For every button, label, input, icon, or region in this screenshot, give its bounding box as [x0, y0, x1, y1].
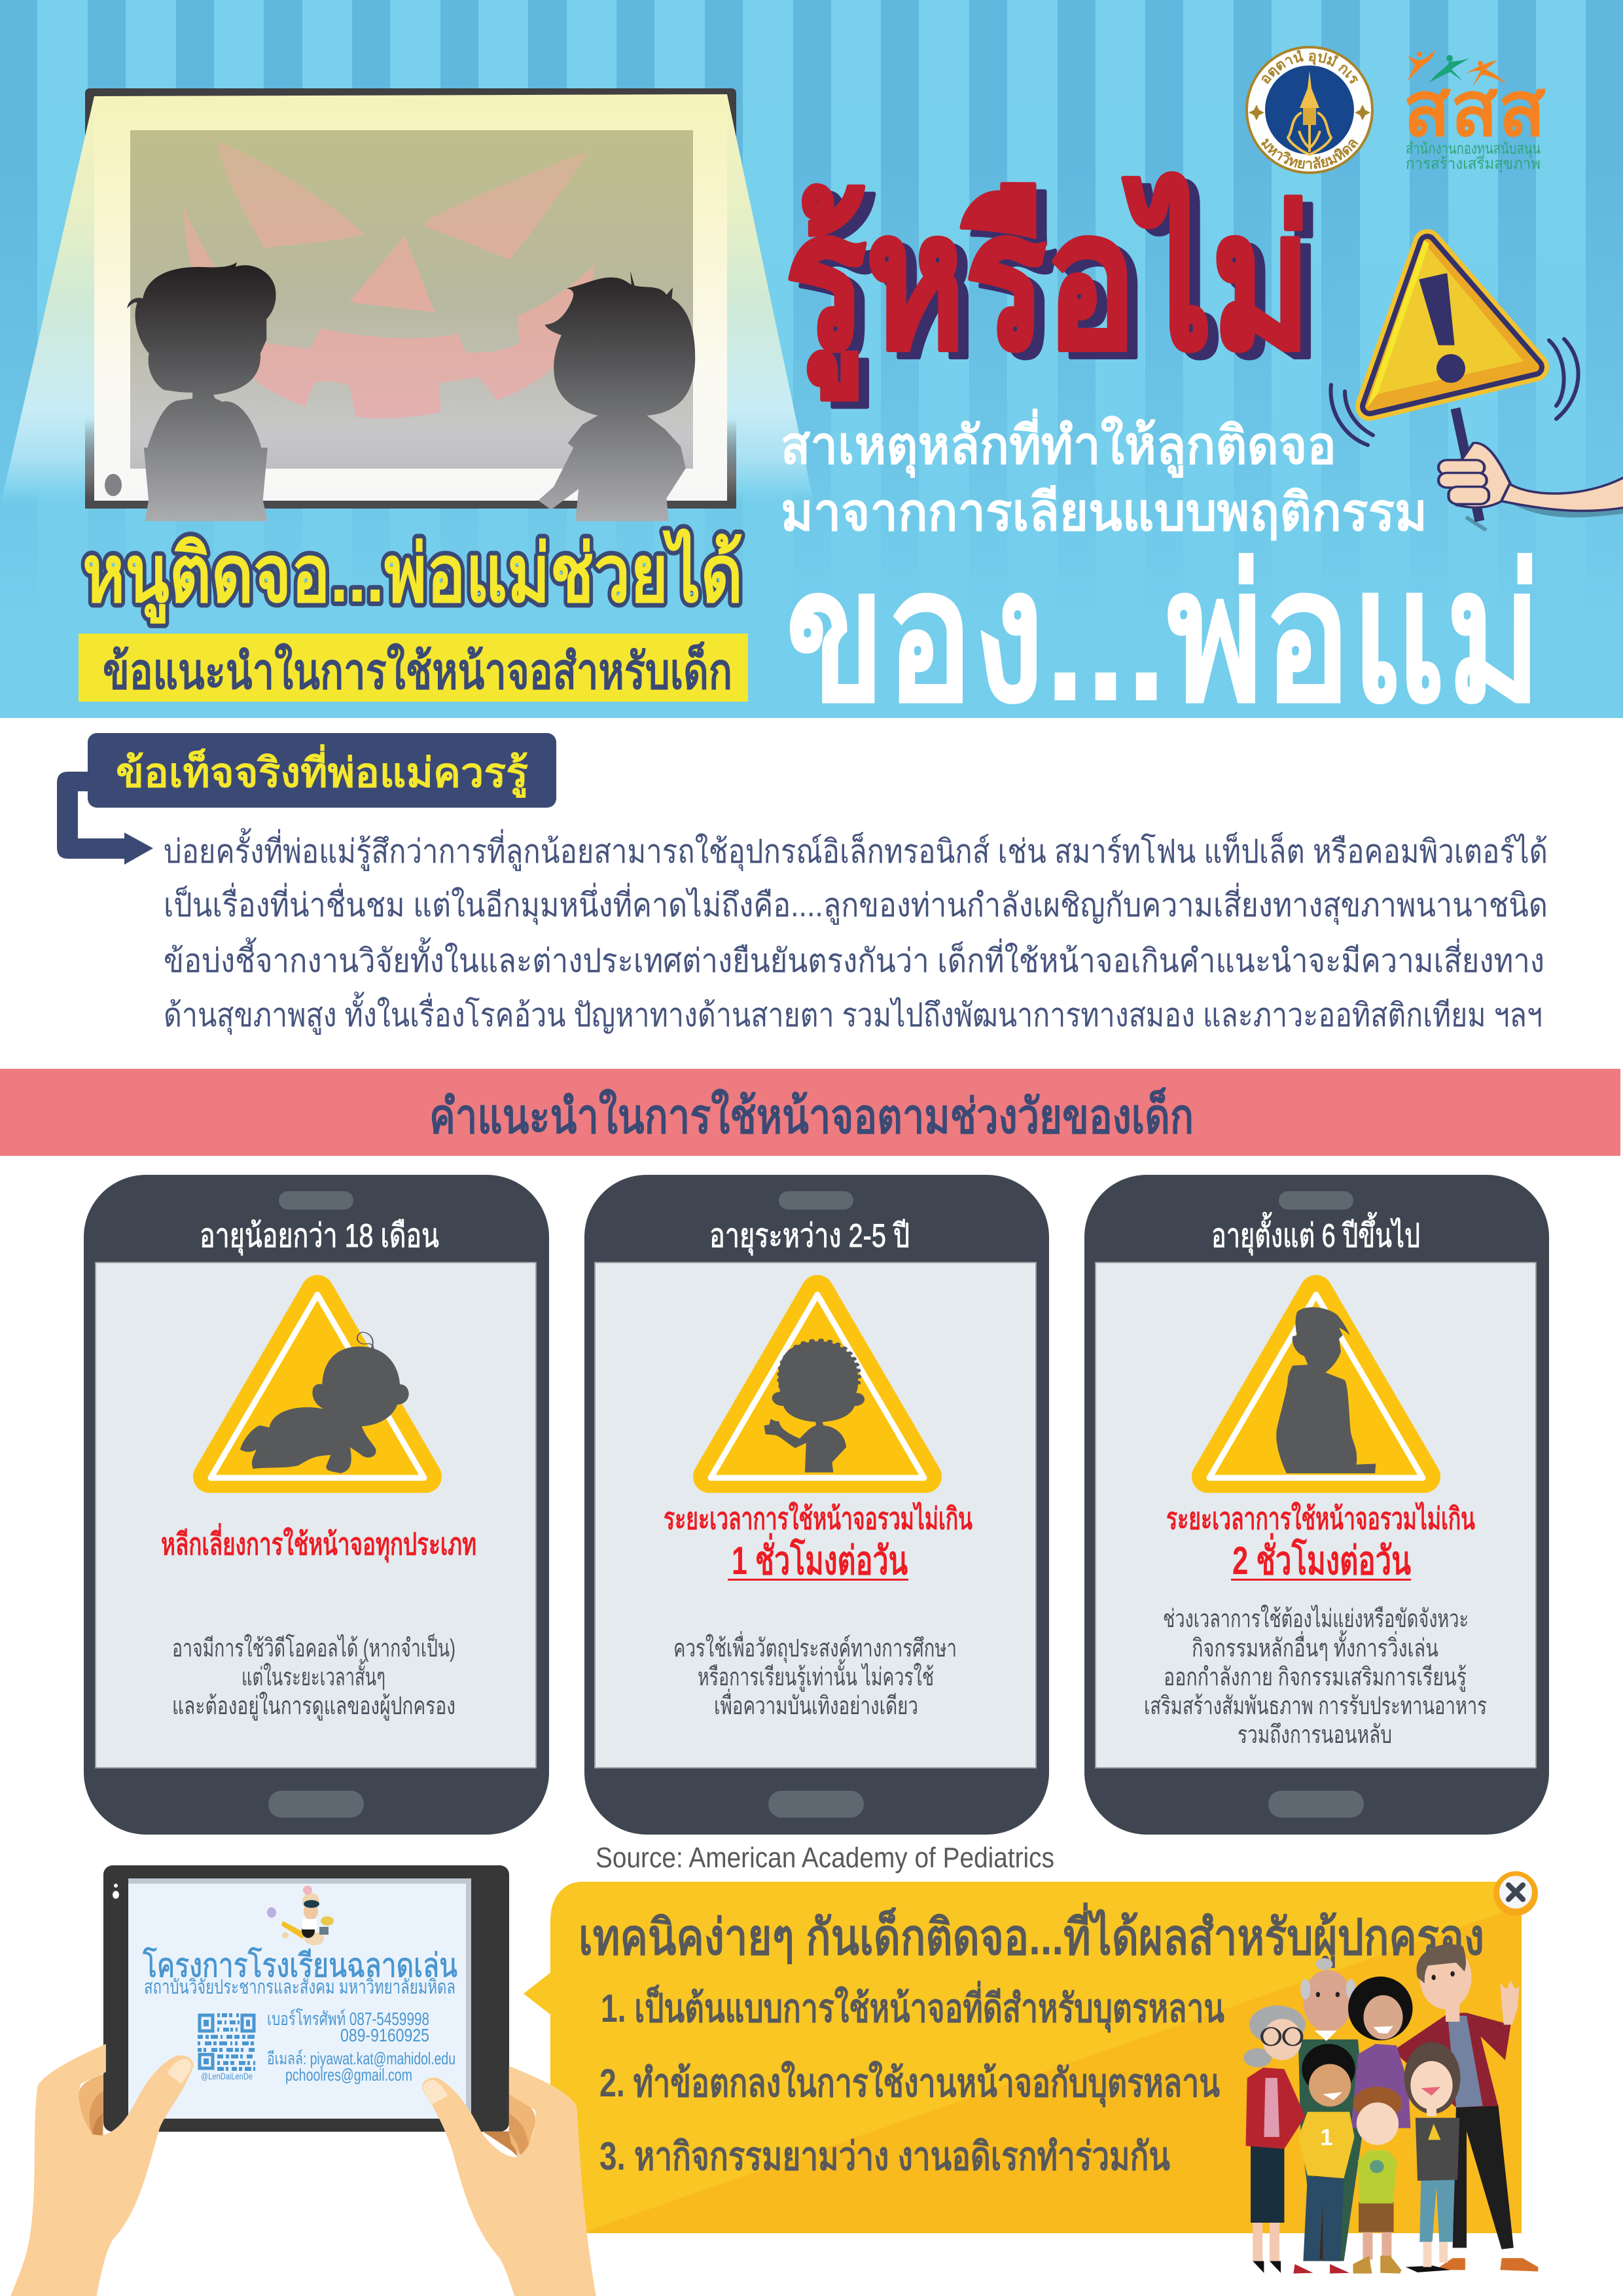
section: facts [57, 733, 1548, 1035]
tablet device [103, 1865, 509, 2132]
advice details: และต้องอยู่ในการดูแลของผู้ปกครอง [172, 1692, 455, 1721]
pumpkin face [184, 141, 595, 418]
left child silhouette [128, 262, 276, 521]
section banner: คำแนะนำในการใช้หน้าจอตามช่วงวัยของเด็ก [429, 1088, 1194, 1143]
QR handle: @LenDaiLenDe [201, 2071, 253, 2081]
tip 3: 3. หากิจกรรมยามว่าง งานอดิเรกทำร่วมกัน [599, 2134, 1170, 2178]
hero panel [0, 0, 1623, 740]
advice details: ควรใช้เพื่อวัตถุประสงค์ทางการศึกษา [673, 1631, 957, 1663]
project mascot logo [267, 1886, 334, 1945]
red advice: หลีกเลี่ยงการใช้หน้าจอทุกประเภท [161, 1523, 476, 1563]
headline line: main cause: สาเหตุหลักที่ทำให้ลูกติดจอ [781, 410, 1336, 477]
panel: tips speech bubble [524, 1871, 1538, 2233]
family illustration [1243, 1945, 1538, 2274]
grandmother [1243, 2005, 1306, 2273]
source note: Source: American Academy of Pediatrics [596, 1842, 1054, 1874]
subtitle yellow bar [79, 634, 748, 702]
logo: ThaiHealth: การสร้างเสริมสุขภาพ [1406, 155, 1541, 173]
motion arcs [1330, 339, 1578, 445]
project name: โครงการโรงเรียนฉลาดเล่น [143, 1947, 457, 1984]
arrow connector [57, 772, 153, 865]
tablet with hands [10, 1865, 596, 2296]
advice details: เสริมสร้างสัมพันธภาพ การรับประทานอาหาร [1144, 1693, 1487, 1720]
time limit [728, 1533, 908, 1583]
left hand [10, 2044, 194, 2296]
facts paragraph [164, 828, 1548, 1035]
logo: ThaiHealth [1403, 50, 1546, 173]
logo: ThaiHealth: สสส [1403, 66, 1546, 152]
arm shadow [1512, 497, 1623, 518]
advice details: ช่วงเวลาการใช้ต้องไม่แย่งหรือขัดจังหวะ [1163, 1605, 1469, 1633]
warning triangle with child [709, 1291, 925, 1478]
advice details: กิจกรรมหลักอื่นๆ ทั้งการวิ่งเล่น [1192, 1630, 1438, 1662]
contact details: อีเมลล์: piyawat.kat@mahidol.edu [267, 2049, 455, 2068]
advice details: แต่ในระยะเวลาสั้นๆ [241, 1659, 385, 1691]
institute name: สถาบันวิจัยประชากรและสังคม มหาวิทยาลัยมหิดล [144, 1977, 455, 1998]
headline: do you know: รู้หรือไม่ [796, 179, 1321, 408]
age heading: อายุน้อยกว่า 18 เดือน [200, 1217, 439, 1255]
contact details [267, 2008, 455, 2085]
father [1397, 1945, 1538, 2271]
warning triangle with baby [209, 1291, 425, 1478]
older boy [1293, 2044, 1355, 2274]
advice details: หรือการเรียนรู้เท่านั้น ไม่ควรใช้ [698, 1659, 934, 1692]
seal crest [1288, 71, 1331, 154]
mother [1348, 1977, 1413, 2128]
panel: phone ages 2-5 [584, 1175, 1049, 1835]
tip 2: 2. ทำข้อตกลงในการใช้งานหน้าจอกับบุตรหลาน [599, 2060, 1220, 2108]
advice details: ออกกำลังกาย กิจกรรมเสริมการเรียนรู้ [1164, 1664, 1467, 1692]
right child silhouette [538, 271, 695, 521]
contact details: 089-9160925 [340, 2025, 429, 2045]
advice details: เพื่อความบันเทิงอย่างเดียว [714, 1689, 918, 1720]
headline line: imitating behaviour: มาจากการเลียนแบบพฤติกรรม [781, 483, 1427, 541]
advice details [1144, 1605, 1487, 1749]
advice details: อาจมีการใช้วิดีโอคอลได้ (หากจำเป็น) [172, 1633, 455, 1662]
panel: phone ages 6 and up [1084, 1175, 1549, 1835]
facts label [88, 733, 556, 808]
sign shadow and pole [1455, 408, 1486, 530]
projector screen with pumpkin face and children [0, 88, 815, 521]
logo: ThaiHealth: สำนักงานกองทุนสนับสนุน [1406, 140, 1541, 158]
hero background with stripes [0, 0, 1623, 718]
warning triangle [1366, 240, 1535, 408]
tip 1: 1. เป็นต้นแบบการใช้หน้าจอที่ดีสำหรับบุตรหลาน [601, 1981, 1224, 2033]
QR code [198, 2015, 255, 2069]
advice details: รวมถึงการนอนหลับ [1238, 1721, 1392, 1749]
logo: Mahidol University seal: มหาวิทยาลัยมหิดล [1261, 139, 1359, 169]
warning triangle with teen [1208, 1291, 1424, 1478]
logo people marks [1407, 50, 1507, 86]
older boy: 1 [1320, 2125, 1333, 2151]
close button [1493, 1871, 1538, 1916]
red advice: ระยะเวลาการใช้หน้าจอรวมไม่เกิน [664, 1501, 972, 1535]
advice details [673, 1631, 957, 1720]
arm and fist [1438, 443, 1623, 511]
young boy [1353, 2087, 1402, 2274]
time limit: 2 ชั่วโมงต่อวัน [1232, 1533, 1411, 1583]
age heading: อายุตั้งแต่ 6 ปีขึ้นไป [1211, 1212, 1420, 1255]
section banner [0, 1069, 1620, 1156]
contact details: เบอร์โทรศัพท์ 087-5459998 [267, 2008, 429, 2029]
panel: phone under 18 months [84, 1175, 549, 1835]
red advice: ระยะเวลาการใช้หน้าจอรวมไม่เกิน [1166, 1501, 1475, 1535]
time limit: 1 ชั่วโมงต่อวัน [732, 1533, 908, 1583]
logo: Mahidol University seal: อตฺตานํ อุปมํ กเร [1262, 50, 1359, 84]
time limit [1231, 1533, 1411, 1583]
subtitle yellow bar: ข้อแนะนำในการใช้หน้าจอสำหรับเด็ก [103, 641, 732, 700]
age heading: อายุระหว่าง 2-5 ปี [709, 1217, 910, 1255]
facts label: ข้อเท็จจริงที่พ่อแม่ควรรู้ [116, 744, 528, 798]
title: screen addiction: หนูติดจอ...พ่อแม่ช่วยได้ [82, 529, 743, 624]
right hand [422, 2066, 596, 2296]
logo: Mahidol University seal [1245, 46, 1374, 174]
contact details: pchoolres@gmail.com [285, 2065, 412, 2085]
icon: hand holding warning sign [1330, 240, 1623, 530]
advice details [172, 1633, 455, 1721]
headline: do you know: รู้หรือไม่ [785, 172, 1311, 401]
grandfather [1298, 1958, 1365, 2261]
girl [1404, 2042, 1460, 2272]
